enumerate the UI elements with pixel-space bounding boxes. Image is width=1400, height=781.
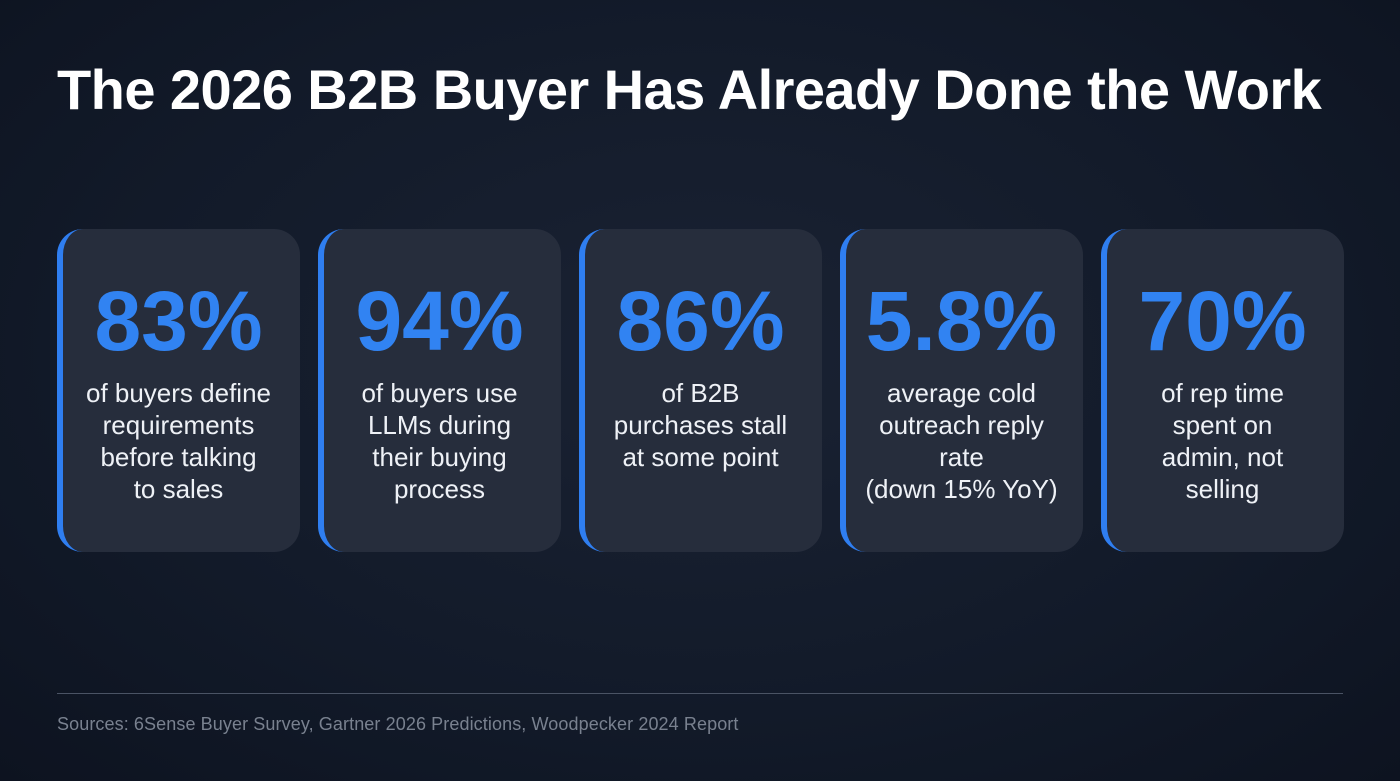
card: 70%: 70%	[1138, 274, 1307, 368]
card: 83%: to sales	[134, 474, 223, 504]
card: 70%: of rep time	[1161, 378, 1284, 408]
card: 83%: of buyers define	[86, 378, 271, 408]
card: 94%	[318, 229, 561, 552]
card: 94%: LLMs during	[368, 410, 511, 440]
card: 83%	[57, 229, 300, 552]
card: 86%	[579, 229, 822, 552]
card: 94%: of buyers use	[361, 378, 518, 408]
title: The 2026 B2B Buyer Has Already Done the Work	[57, 58, 1321, 121]
card: 94%: process	[394, 474, 485, 504]
card: 70%: spent on	[1173, 410, 1272, 440]
card: 86%: purchases stall	[614, 410, 787, 440]
card: 70%: admin, not	[1162, 442, 1283, 472]
card: 83%: requirements	[103, 410, 254, 440]
card: 86%: 86%	[616, 274, 785, 368]
card: 70%	[1101, 229, 1344, 552]
card: 70%: selling	[1186, 474, 1259, 504]
card: 94%: 94%	[355, 274, 524, 368]
card: 5.8%: average cold	[887, 378, 1036, 408]
card: 94%: their buying	[372, 442, 507, 472]
sources: Sources: 6Sense Buyer Survey, Gartner 2026 Predictions, Woodpecker 2024 Report	[57, 714, 738, 734]
card: 5.8%: rate	[939, 442, 984, 472]
card: 86%: at some point	[622, 442, 779, 472]
card: 83%: 83%	[94, 274, 263, 368]
card: 86%: of B2B	[661, 378, 740, 408]
card: 83%: before talking	[100, 442, 257, 472]
card: 5.8%: 5.8%	[866, 274, 1057, 368]
card: 5.8%: (down 15% YoY)	[865, 474, 1058, 504]
card: 5.8%: outreach reply	[879, 410, 1044, 440]
card: 5.8%	[840, 229, 1083, 552]
